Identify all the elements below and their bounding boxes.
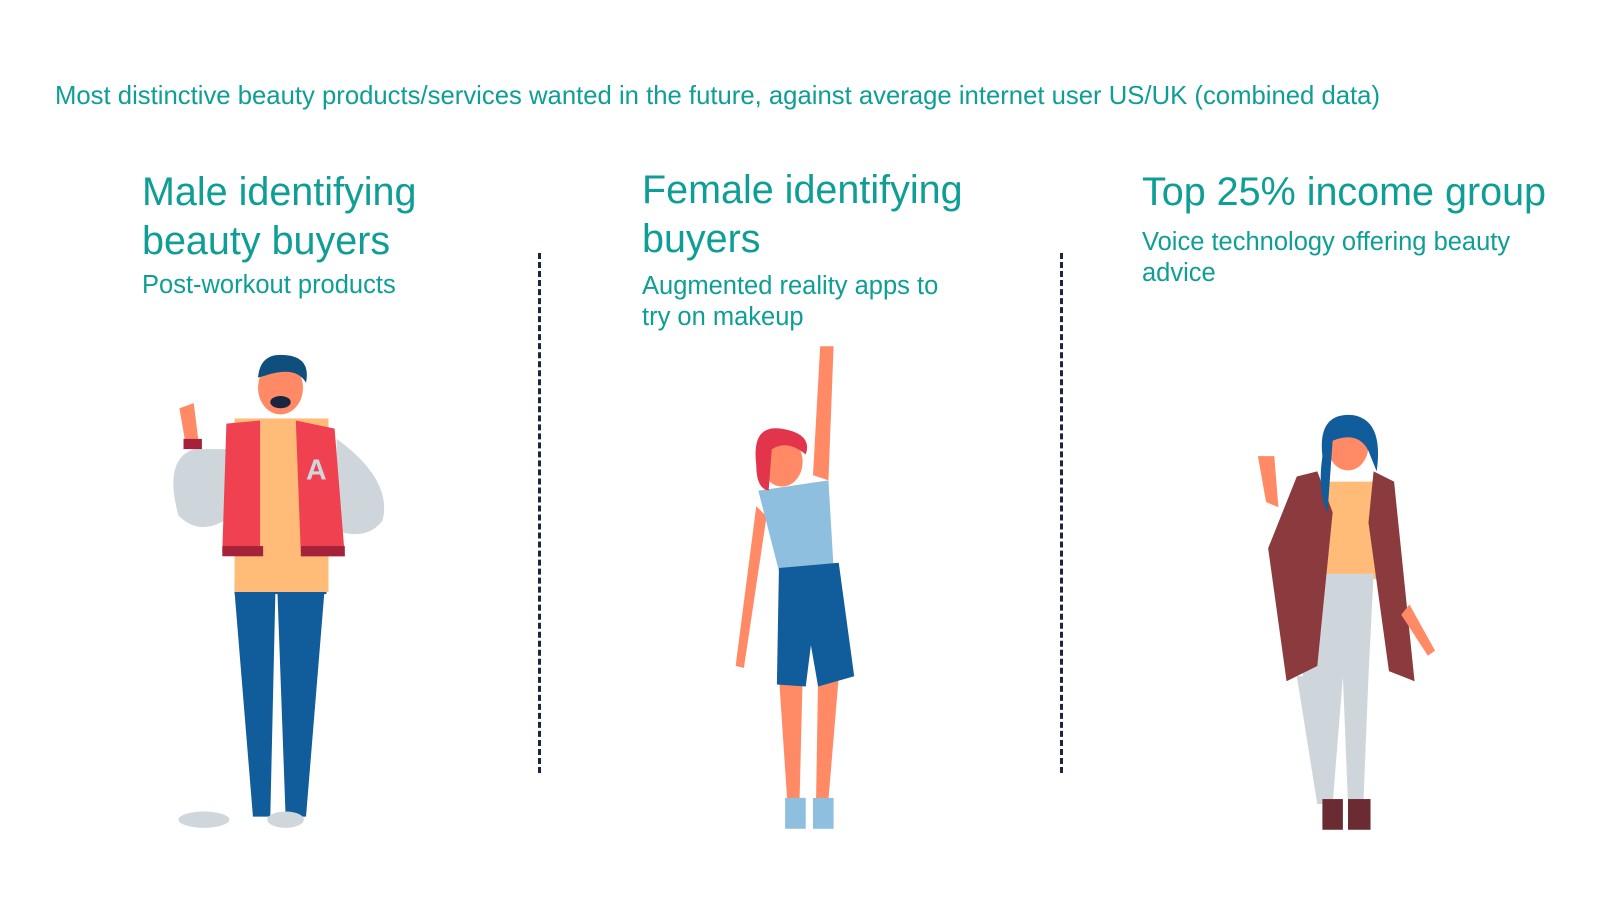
- panel heading: income: advice: [1142, 259, 1216, 287]
- illustration: male: [173, 354, 384, 828]
- panel heading: income: Voice technology offering beauty: [1142, 228, 1510, 256]
- panel heading: female: Female identifying: [642, 168, 963, 212]
- panel heading: male: Post-workout products: [142, 271, 396, 299]
- panel heading: male: beauty buyers: [142, 219, 390, 263]
- panel heading: female: [642, 168, 963, 331]
- panel heading: income: Top 25% income group: [1142, 170, 1546, 214]
- illustration: income: [1258, 414, 1435, 830]
- illustration: female: [736, 346, 854, 829]
- divider 2: [1060, 253, 1063, 773]
- illustration: male: A: [306, 455, 327, 487]
- panel heading: female: try on makeup: [642, 303, 804, 331]
- panel heading: female: Augmented reality apps to: [642, 272, 938, 300]
- panel heading: income: [1142, 170, 1546, 287]
- panel heading: male: [142, 170, 416, 299]
- divider 1: [538, 253, 541, 773]
- panel heading: male: Male identifying: [142, 170, 416, 214]
- title: Most distinctive beauty products/services wanted in the future, against average internet user US/UK (combined data): [55, 82, 1380, 110]
- panel heading: female: buyers: [642, 217, 761, 261]
